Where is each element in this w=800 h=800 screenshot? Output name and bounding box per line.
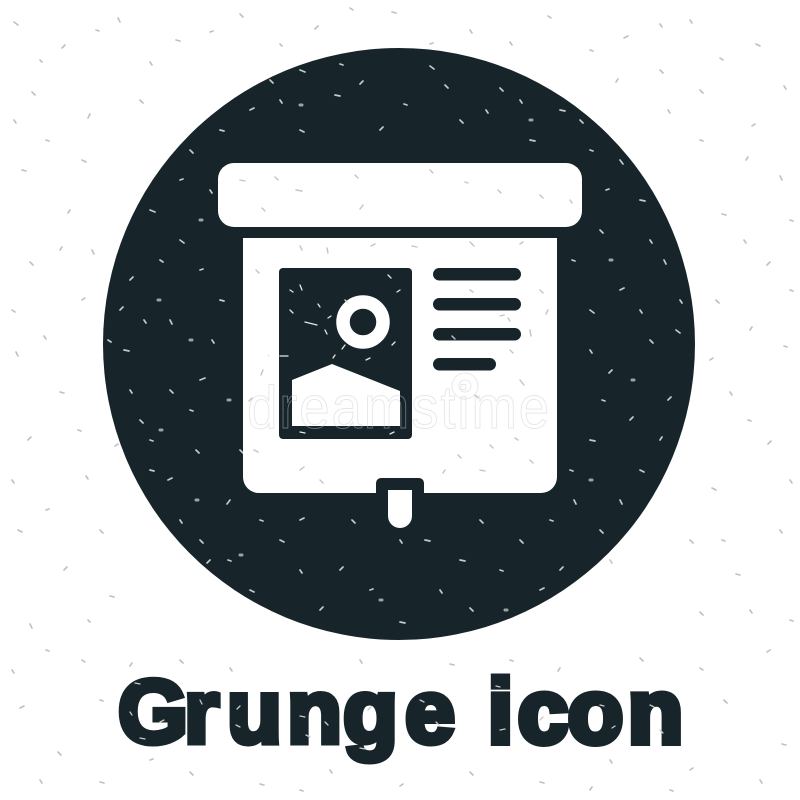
icon: dark circle badge xyxy=(103,48,695,640)
icon: projector roller bar xyxy=(218,163,582,227)
watermark: dreamstime xyxy=(247,374,551,441)
icon: sun ring xyxy=(343,302,383,342)
picture grunge specks xyxy=(268,275,400,434)
icon: mountain xyxy=(292,364,400,426)
text lines on screen xyxy=(433,268,521,370)
title: Grunge icon xyxy=(118,662,683,762)
icon: pull handle xyxy=(388,490,412,528)
circle grunge specks xyxy=(108,64,682,623)
screen grunge specks xyxy=(240,170,572,483)
title: Grunge icon: icon xyxy=(488,662,683,762)
title: Grunge icon: Grunge xyxy=(118,662,455,762)
icon: picture frame xyxy=(279,268,412,439)
icon: projection screen xyxy=(243,238,557,493)
title grunge specks xyxy=(130,683,663,749)
